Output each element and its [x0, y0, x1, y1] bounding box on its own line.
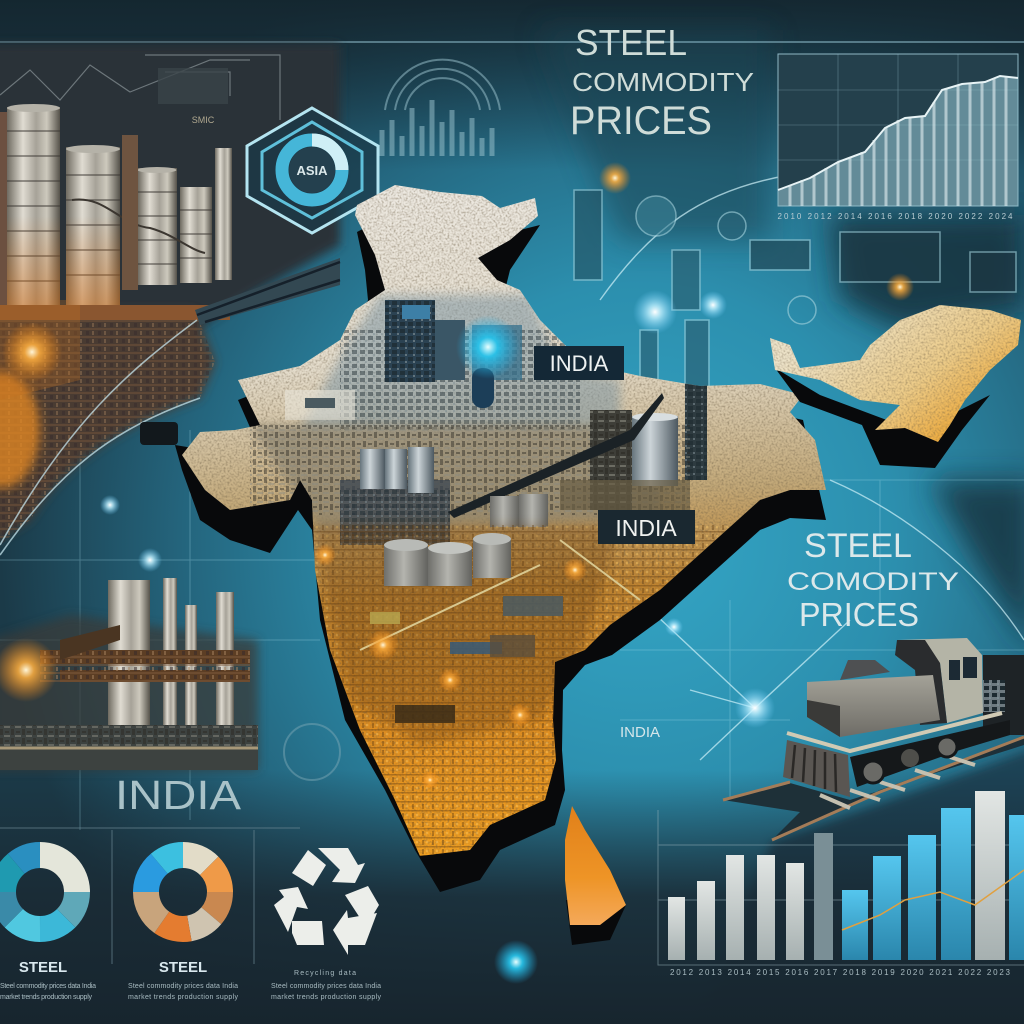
caption: recycling: Steel commodity prices data India [271, 983, 381, 990]
bar chart axis labels: 2012 2013 2014 2015 2016 2017 2018 2019 2020 2021 2022 2023 [670, 968, 1011, 977]
title: steel commodity prices top: PRICES [570, 99, 712, 143]
title: steel commodity prices top: STEEL [575, 22, 687, 63]
caption: steel left: STEEL [19, 959, 67, 976]
caption: steel centre [128, 959, 238, 1001]
caption: recycling [271, 970, 382, 1001]
network lights [100, 162, 914, 984]
map lights [314, 315, 587, 789]
cab [897, 638, 983, 723]
label: India upper [534, 346, 624, 380]
deck [787, 713, 1002, 751]
heading: India lower left: INDIA [115, 772, 242, 818]
title: steel commodity prices right: COMODITY [787, 568, 959, 596]
illustration: locomotive [723, 638, 1024, 840]
label: India upper: INDIA [550, 351, 609, 376]
icon: hexagon dial [247, 108, 378, 233]
decoration: radial gauge and small bars [382, 60, 500, 156]
caption: steel left: market trends production supply [0, 994, 92, 1001]
title: steel commodity prices top [570, 22, 754, 143]
map shadow: India [175, 212, 826, 892]
panel: schematic icons, upper right [574, 190, 1016, 390]
caption: steel centre: STEEL [159, 959, 207, 976]
title: steel commodity prices right: STEEL [804, 527, 912, 565]
rear car [983, 655, 1024, 735]
caption: recycling: Recycling data [294, 970, 356, 977]
line chart: top right [778, 54, 1018, 221]
panel: rusty industrial zone, left [0, 300, 230, 555]
title: steel commodity prices top: COMMODITY [572, 67, 754, 97]
panel: dark control graphics, top left [0, 44, 340, 340]
map shadow: north east [775, 368, 990, 468]
map texture [170, 180, 840, 870]
map: Sri Lanka [565, 806, 626, 945]
lower belt: orange circuit [313, 520, 728, 856]
middle belt: tan grey plants [250, 393, 690, 545]
label: India lower [598, 510, 695, 544]
chart: donut one [3, 855, 77, 929]
track [723, 737, 1024, 840]
hood [807, 675, 940, 737]
chart: donut two [146, 855, 220, 929]
chart axis labels: 2010 2012 2014 2016 2018 2020 2022 2024 [778, 212, 1013, 221]
map: India [170, 180, 840, 870]
label: small India: INDIA [620, 724, 660, 741]
glow: left orange light [2, 322, 62, 382]
bar chart: lower right [658, 791, 1024, 977]
icon: recycling arrows [274, 848, 379, 955]
caption: steel centre: Steel commodity prices data India [128, 983, 238, 990]
map: north east India [770, 305, 1021, 442]
title: steel commodity prices right [787, 527, 959, 633]
caption: steel centre: market trends production supply [128, 994, 238, 1001]
undercarriage [850, 720, 1010, 787]
upper city: blue-grey industrial towers [285, 295, 707, 480]
small text: control label: SMIC [192, 115, 215, 125]
panel dividers [0, 828, 300, 964]
icon label: ASIA [296, 163, 328, 178]
caption: steel left: Steel commodity prices data India [0, 983, 96, 990]
caption: recycling: market trends production supply [271, 994, 382, 1001]
plow [783, 740, 850, 797]
title: steel commodity prices right: PRICES [799, 596, 919, 633]
label: India lower: INDIA [615, 515, 677, 541]
panel: steel plant, lower left [0, 578, 340, 780]
caption: steel left [0, 959, 96, 1001]
illustration: storage tanks [0, 104, 340, 325]
